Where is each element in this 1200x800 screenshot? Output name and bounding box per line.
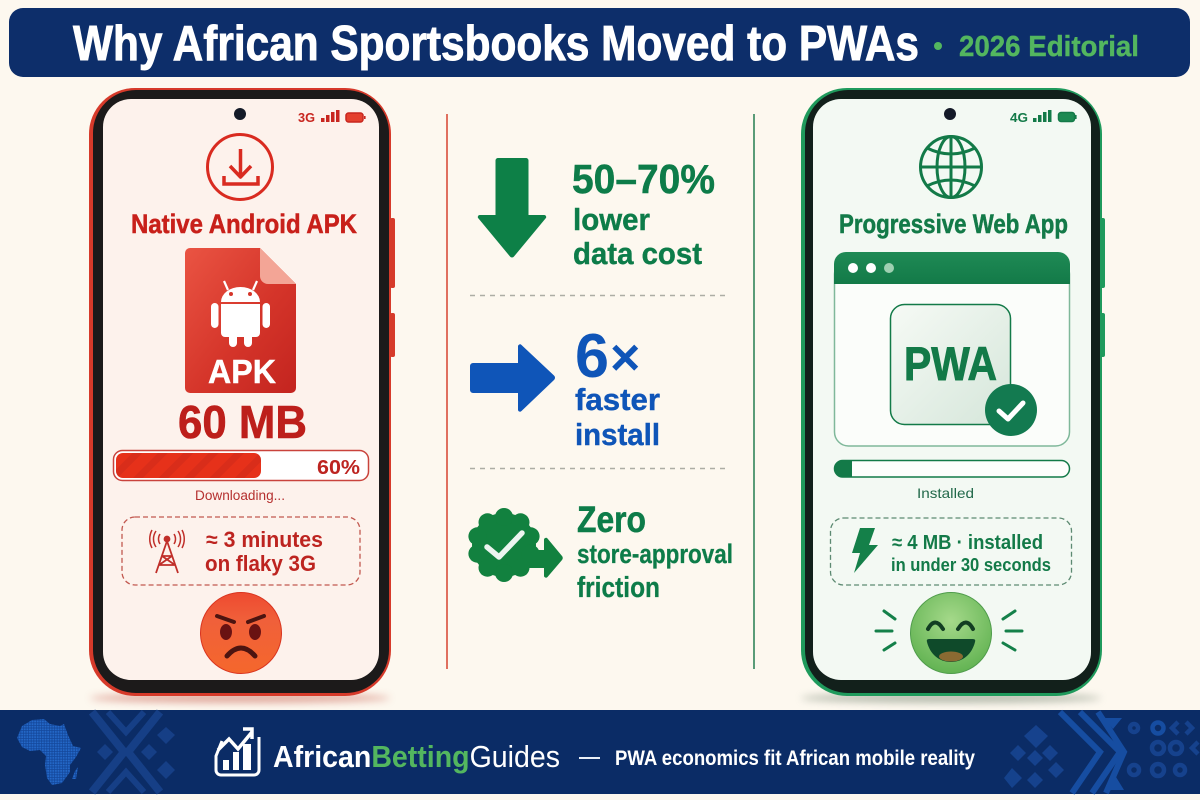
icon: download: [208, 134, 272, 200]
heading: PWA: Progressive Web App: [839, 209, 1068, 239]
status bar: 3G: [298, 110, 366, 125]
status bar: 4G: [1010, 110, 1077, 125]
progress bar: installed: [834, 460, 1070, 478]
stat: faster install: ×: [610, 329, 640, 387]
icon: check badge: [985, 384, 1037, 436]
stat: zero friction: [468, 499, 733, 604]
icon: APK file: [185, 248, 296, 393]
divider: red: [446, 114, 448, 669]
pattern: right geometric: [1004, 712, 1198, 793]
tagline: PWA economics fit African mobile reality: [615, 747, 975, 770]
heading: native: Native Android APK: [131, 209, 357, 239]
brand wordmark: AfricanBettingGuides: [273, 739, 560, 774]
PWA tile: [890, 304, 1010, 424]
callout: 3 minutes: on flaky 3G: [205, 551, 316, 576]
camera: [234, 108, 246, 120]
progress bar: 60%: 60%: [317, 457, 360, 479]
stat: faster install: [470, 322, 660, 452]
status: downloading: Downloading...: [195, 488, 285, 503]
icon: right arrow: [470, 344, 555, 412]
callout: 3 minutes: [122, 517, 360, 585]
stat: zero friction: store-approval: [577, 539, 733, 569]
icon: lightning bolt: [852, 528, 878, 573]
icon: APK file: APK: [208, 353, 276, 390]
map of Africa: [17, 719, 81, 785]
icon: happy face: [876, 592, 1022, 674]
stat: faster install: faster: [575, 382, 660, 417]
divider: green: [753, 114, 755, 669]
stat: faster install: install: [575, 417, 660, 452]
progress bar: 60%: [114, 450, 368, 480]
camera: [944, 108, 956, 120]
PWA tile: PWA: [904, 337, 997, 390]
stat: zero friction: Zero: [577, 499, 646, 540]
title: Why African Sportsbooks Moved to PWAs: [73, 17, 919, 71]
callout: 3 minutes: ≈ 3 minutes: [206, 527, 323, 552]
phone: progressive web app: [801, 88, 1105, 703]
icon: angry face: [200, 592, 282, 674]
callout: 4 MB: ≈ 4 MB · installed: [892, 532, 1043, 554]
pattern: left kente: [92, 712, 175, 792]
logo icon: [216, 729, 259, 775]
status bar: 4G: 4G: [1010, 110, 1028, 125]
browser window: [834, 252, 1070, 446]
callout: 4 MB: [830, 518, 1072, 585]
size: 60 MB: 60 MB: [178, 396, 307, 448]
stat: lower data cost: lower: [573, 202, 650, 237]
phone: native Android APK: [89, 88, 395, 703]
icon: globe: [920, 136, 982, 198]
icon: badge with arrow: [468, 508, 563, 582]
stat: faster install: 6: [575, 322, 609, 391]
icon: cell tower: [150, 530, 184, 573]
status bar: 3G: 3G: [298, 110, 315, 125]
edition label: 2026 Editorial: [959, 31, 1139, 63]
stat: lower data cost: [478, 156, 715, 271]
icon: down arrow: [478, 158, 546, 258]
stat: lower data cost: data cost: [573, 236, 702, 271]
stat: zero friction: friction: [577, 572, 660, 604]
status: installed: Installed: [917, 485, 974, 501]
footer band: [0, 710, 1200, 794]
header banner: [9, 8, 1190, 77]
stat: lower data cost: 50–70%: [572, 156, 715, 202]
callout: 4 MB: in under 30 seconds: [891, 555, 1051, 575]
